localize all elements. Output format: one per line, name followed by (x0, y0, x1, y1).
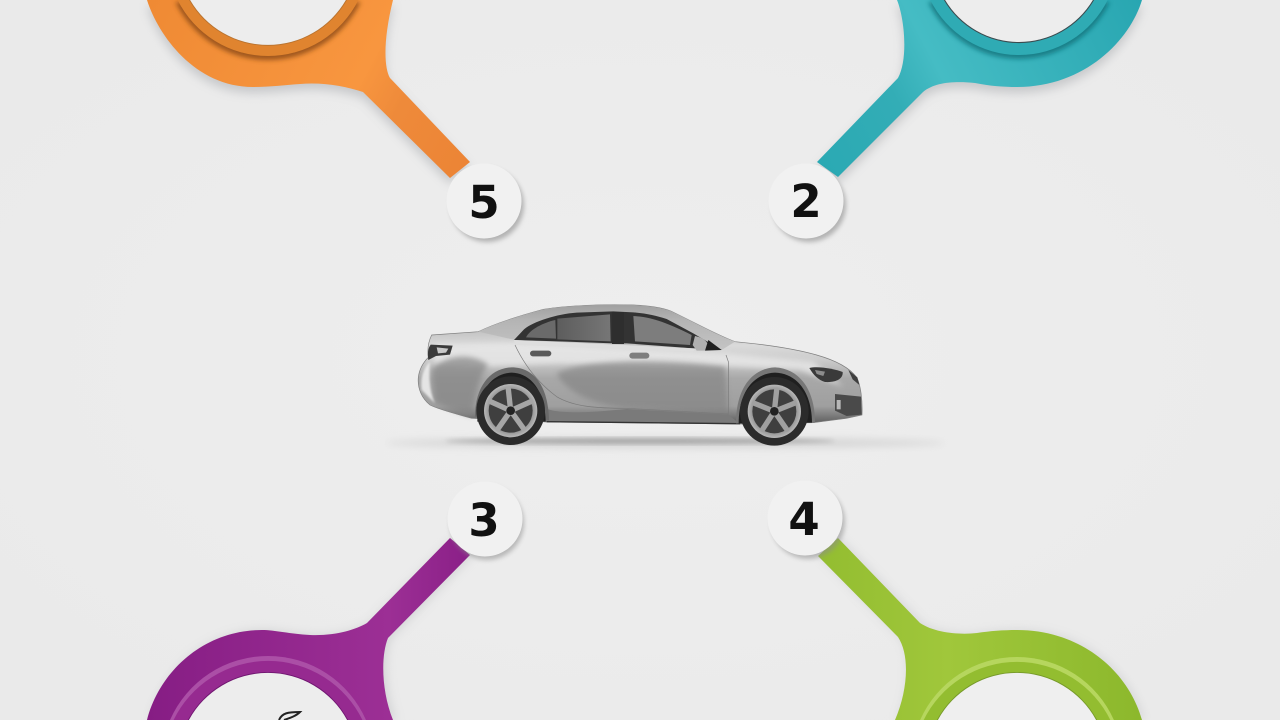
panel: item 5 orange connector (147, 0, 470, 184)
badge: number 2 (768, 164, 846, 242)
b pillar (612, 312, 624, 344)
sill dark line (547, 421, 740, 424)
badge: number 3: 3 (468, 494, 500, 547)
car ground shadow (385, 438, 945, 448)
roof shading (478, 305, 735, 350)
badge: number 4 (768, 480, 845, 559)
quarter glass (526, 320, 556, 339)
fog lamp (837, 400, 841, 409)
badge: number 5 (446, 164, 524, 242)
arch inner front (739, 373, 812, 423)
front bumper intake (835, 394, 862, 416)
illustration: silver sedan (418, 305, 862, 446)
front glass (633, 316, 692, 345)
arch inner rear (477, 373, 546, 422)
headlamp (809, 367, 843, 382)
door shadow sweep (557, 361, 728, 413)
rear wheel (476, 376, 545, 445)
mirror base (705, 340, 722, 351)
rear handle (530, 351, 551, 356)
badge: number 4: 4 (788, 493, 820, 546)
tail lamp (428, 345, 453, 360)
rear glass (557, 314, 611, 341)
front marker (848, 370, 859, 385)
window frame (514, 311, 722, 350)
badge: number 5: 5 (468, 176, 500, 229)
upper body highlight (433, 343, 843, 387)
front wheel arch (736, 367, 815, 423)
tail lamp lens (437, 347, 448, 353)
rear edge highlight (421, 362, 435, 403)
badge: number 2: 2 (790, 175, 822, 228)
rear quarter shadow (432, 357, 488, 417)
sill (542, 407, 740, 424)
mirror (693, 336, 708, 351)
car body (418, 305, 862, 424)
badge: number 3 (448, 482, 524, 560)
headlamp lens (815, 370, 825, 376)
belt line (514, 340, 695, 352)
panel: item 4 green connector (818, 538, 1144, 720)
front handle (629, 353, 649, 359)
panel: item 3 purple connector (147, 538, 473, 720)
door seam (515, 345, 728, 414)
icon: partial item 3 glyph (279, 712, 300, 720)
front wheel (740, 377, 809, 446)
rear wheel arch (475, 367, 549, 421)
panel: item 2 teal connector (817, 0, 1142, 183)
